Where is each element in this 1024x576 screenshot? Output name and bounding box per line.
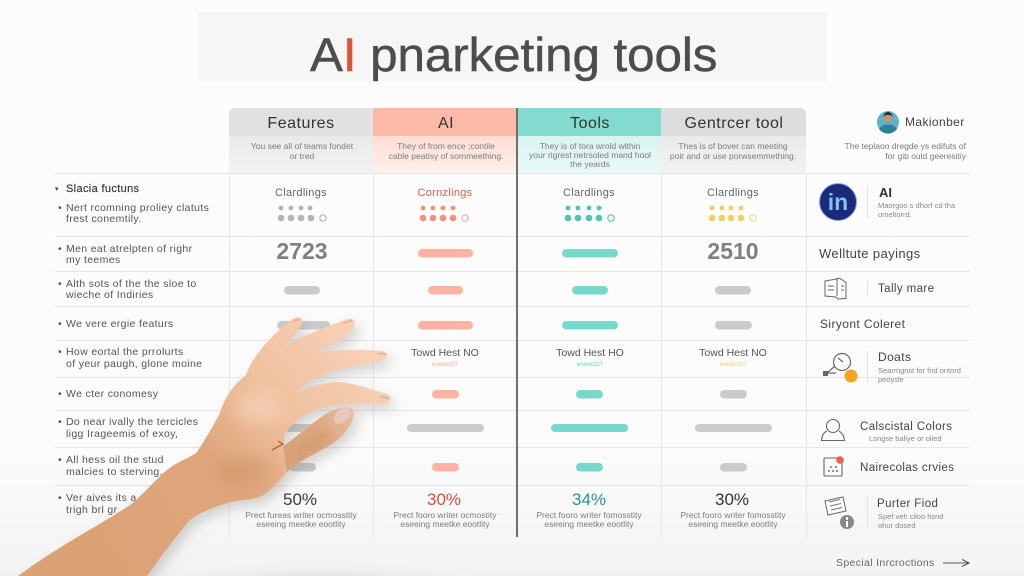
column descriptions: or tred xyxy=(290,151,315,161)
item: calscistal colors: Lsngse baliye or olied xyxy=(869,434,942,443)
row 9: percentages: eseeing meetke eootlity xyxy=(688,519,778,529)
column descriptions: You see all of teams fondet xyxy=(251,141,354,151)
row labels: of yeur paugh, glone moine xyxy=(66,358,202,370)
row 1: ratings: Clardlings xyxy=(275,187,327,199)
row 9: percentages: eseeing meetke eootlity xyxy=(544,519,634,529)
row 9: percentages: eseeing meetke eootlity xyxy=(400,519,490,529)
row labels: • xyxy=(58,346,62,358)
column headers: AI xyxy=(438,115,454,132)
row labels: wieche of Indiries xyxy=(65,289,153,301)
icon: profile with gold badge xyxy=(823,354,858,382)
item: nairecolas crvies: Nairecolas crvies xyxy=(860,462,954,474)
row labels: Slacia fuctuns xyxy=(66,183,140,195)
row labels: frest conemtily. xyxy=(66,213,141,225)
icon: linkedin badge: in xyxy=(828,189,848,215)
item: tally mare: Tally mare xyxy=(878,283,934,295)
row labels: • xyxy=(58,492,62,504)
row 9: percentages: eseeing meetke eootlity xyxy=(256,519,346,529)
column headers: Gentrcer tool xyxy=(685,115,783,132)
author description xyxy=(845,141,967,161)
author avatar xyxy=(877,111,899,134)
item: purter fiod: Spef veh ciloo hsnd xyxy=(878,512,943,521)
rating dots: generator tool xyxy=(709,206,756,221)
row labels: • xyxy=(58,243,62,255)
item: doats: peoysle xyxy=(878,375,904,384)
row 9: percentages: Prect fooro writer ocmostity xyxy=(394,510,497,520)
row labels: Men eat atrelpten of righr xyxy=(66,243,193,255)
floor shadow under hand xyxy=(130,530,510,576)
row labels: Alth sots of the the sloe to xyxy=(66,278,197,290)
row 9: percentages: Prect fooro writer fomosstity xyxy=(680,510,786,520)
row labels: my teemes xyxy=(66,254,120,266)
row labels: Ver aives its a xyxy=(66,492,137,504)
row labels: We vere ergie featurs xyxy=(66,318,174,330)
AI item: Maorgoo s dhorf cd tha xyxy=(878,201,956,210)
finger: thumb xyxy=(255,407,354,480)
column descriptions: They of from ence ;contile xyxy=(397,141,495,151)
column descriptions: They is of tora wrold within xyxy=(540,141,641,151)
row labels: • xyxy=(58,454,62,466)
row labels: • xyxy=(58,318,62,330)
column headers: Tools xyxy=(570,115,610,132)
rows 6 to 8: bars xyxy=(285,390,772,472)
item: calscistal colors: Calscistal Colors xyxy=(860,421,952,433)
row labels: All hess oil the stud xyxy=(66,454,164,466)
row 9: percentages xyxy=(245,490,786,529)
row 5: text values: eseecO? xyxy=(720,361,746,368)
row 1: ratings: Clardlings xyxy=(563,187,615,199)
item: purter fiod: ohur dosed xyxy=(878,521,916,530)
item: doats xyxy=(867,350,961,384)
row labels: Nert rcomning proliey clatuts xyxy=(66,202,209,214)
row labels: Do near ivally the tercicles xyxy=(66,416,198,428)
item: doats: Searmgnst for fnd ontord xyxy=(878,366,961,375)
column headers: Features xyxy=(267,115,335,132)
row 9: percentages: 30% xyxy=(715,490,749,509)
footer link: Special Inrcroctions xyxy=(836,557,935,569)
heading: website payings: Welltute payings xyxy=(819,246,921,261)
hand illustration xyxy=(18,317,390,576)
comparison table xyxy=(55,108,970,537)
row labels: • xyxy=(58,278,62,290)
AI item: omeltorrd. xyxy=(878,210,912,219)
finger: index xyxy=(284,382,390,434)
row 2: values: 2723 xyxy=(276,238,328,264)
row 9: percentages: Prect fooro writer fomosstity xyxy=(536,510,642,520)
title band xyxy=(198,12,827,82)
row 2: values: 2510 xyxy=(707,238,759,264)
author description: The teplaoo dregde ys edifuts of xyxy=(845,141,967,151)
row 5: text values: Towd Hest HO xyxy=(556,347,624,359)
rating dots: features xyxy=(278,206,326,221)
icon: note with info badge xyxy=(825,497,854,529)
item: tally mare xyxy=(867,281,934,296)
row 9: percentages: 50% xyxy=(283,490,317,509)
row 5: text values: eseecO? xyxy=(432,361,458,368)
arrow xyxy=(943,560,969,566)
item: purter fiod: Purter Fiod xyxy=(877,498,938,510)
item: doats: Doats xyxy=(878,350,911,364)
icon: person xyxy=(822,420,844,440)
row 5: text values: Towd Hest NO xyxy=(411,347,479,359)
row labels: How eortal the prrolurts xyxy=(66,346,184,358)
title: AI pnarketing tools xyxy=(310,29,717,82)
column descriptions xyxy=(251,141,796,169)
column descriptions: the yeards xyxy=(570,159,610,169)
heading: siryont coleret: Siryont Coleret xyxy=(820,317,906,331)
finger: ring xyxy=(262,319,355,385)
right sidebar xyxy=(819,111,967,530)
row labels: • xyxy=(58,388,62,400)
row labels: We cter conomesy xyxy=(66,388,159,400)
row labels: trigh brl gr xyxy=(66,504,118,516)
author description: for gib ould geeresitiy xyxy=(885,151,967,161)
column descriptions: poir and or use porwsemmething. xyxy=(670,151,796,161)
fingernails and crease xyxy=(272,319,388,450)
row labels xyxy=(55,183,209,516)
row labels: • xyxy=(58,202,62,214)
row 2: values xyxy=(276,238,759,264)
finger: pinky xyxy=(245,317,302,380)
icon: calendar with red dot xyxy=(824,456,844,476)
row 1: ratings: Cornzlings xyxy=(418,187,473,199)
row 1: ratings xyxy=(275,187,759,221)
row 9: percentages: 34% xyxy=(572,490,606,509)
item: calscistal colors xyxy=(860,421,952,443)
row labels: ligg Irageemis of exoy, xyxy=(66,428,178,440)
author name: Makionber xyxy=(905,115,965,129)
row labels: • xyxy=(58,416,62,428)
row labels: malcies to sterving. xyxy=(66,466,163,478)
column descriptions: cable peatisy of sommeething. xyxy=(389,151,503,161)
icon: linkedin badge xyxy=(820,184,856,220)
row 1: ratings: Clardlings xyxy=(707,187,759,199)
row 5: text values xyxy=(411,347,767,368)
row labels: ▾ xyxy=(55,186,59,193)
rating dots: AI xyxy=(420,206,468,221)
row 5: text values: eseecO? xyxy=(577,361,603,368)
item: purter fiod xyxy=(867,496,943,530)
column descriptions: your rigrest netrsoled mand hool xyxy=(529,150,651,160)
icon: document xyxy=(825,278,846,299)
row 9: percentages: 30% xyxy=(427,490,461,509)
grid lines xyxy=(55,108,970,537)
rows 3 and 4: bars xyxy=(277,286,752,330)
palm and forearm xyxy=(18,376,297,576)
AI item: AI xyxy=(879,185,892,200)
hand shading xyxy=(215,393,332,487)
column headers xyxy=(229,108,806,173)
AI item xyxy=(867,185,956,219)
rating dots: tools xyxy=(565,206,614,221)
row 9: percentages: Prect fureas writer ocmosstity xyxy=(245,510,357,520)
row 5: text values: Towd Hest NO xyxy=(699,347,767,359)
finger: middle xyxy=(283,350,387,392)
column descriptions: Thes is of bover can meeting xyxy=(678,141,788,151)
